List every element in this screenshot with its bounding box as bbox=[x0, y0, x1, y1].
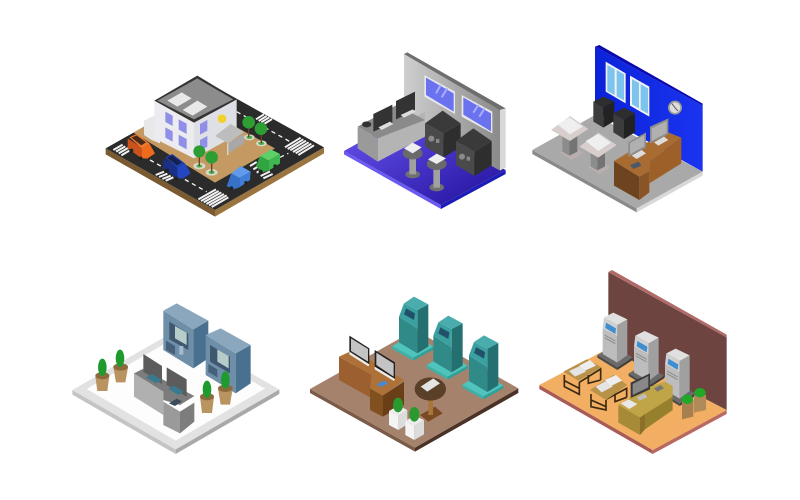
grey ATM 3 bbox=[660, 349, 695, 406]
grey ATM 1 bbox=[597, 313, 633, 370]
floor bbox=[344, 117, 506, 209]
wall bbox=[404, 52, 506, 171]
wall bbox=[608, 270, 727, 410]
trees bbox=[193, 116, 267, 176]
scene: white floor with blue ATMs and plants bbox=[72, 303, 279, 454]
floor bbox=[72, 331, 279, 454]
round table bbox=[415, 377, 446, 422]
dark blue car bbox=[163, 154, 191, 181]
teal ATM 3 bbox=[462, 335, 503, 399]
monitors bbox=[143, 354, 187, 397]
building bbox=[144, 76, 244, 158]
monitors bbox=[628, 118, 668, 159]
floor bbox=[532, 115, 703, 212]
book tables bbox=[563, 359, 627, 410]
scene: grey wall vault room with purple floor bbox=[344, 52, 506, 209]
monitor bbox=[631, 373, 664, 401]
monitors bbox=[373, 92, 416, 132]
wooden desk bbox=[339, 350, 404, 417]
potted plants bbox=[682, 388, 706, 419]
reception desk bbox=[358, 105, 425, 162]
safes bbox=[425, 111, 492, 176]
ATM block 2 bbox=[206, 328, 251, 393]
windows bbox=[424, 75, 492, 133]
wooden desk bbox=[614, 132, 681, 200]
light blue car bbox=[227, 166, 251, 190]
grey ATM 2 bbox=[629, 331, 664, 388]
scene: brown floor with teal ATMs bbox=[310, 297, 518, 452]
scene: maroon wall with grey ATMs on orange floor bbox=[539, 270, 727, 454]
teal ATM 1 bbox=[392, 297, 433, 361]
floor bbox=[539, 348, 727, 454]
block base bbox=[106, 87, 324, 217]
grey desk bbox=[134, 369, 194, 433]
scene: bank building on city block bbox=[106, 76, 324, 217]
crosswalks and lane markings bbox=[113, 112, 314, 207]
teal ATM 2 bbox=[427, 316, 468, 380]
green car bbox=[256, 149, 280, 174]
document stands bbox=[551, 116, 617, 174]
clock bbox=[668, 101, 682, 115]
wall bbox=[595, 45, 703, 172]
orange car bbox=[128, 134, 155, 161]
olive desk bbox=[618, 382, 673, 435]
monitors bbox=[349, 336, 395, 381]
floor bbox=[310, 330, 518, 452]
stands bbox=[403, 143, 447, 191]
tan lot bbox=[133, 102, 275, 183]
ATM block 1 bbox=[163, 303, 208, 368]
potted plants bbox=[95, 350, 233, 413]
white planters bbox=[389, 398, 424, 440]
safes bbox=[593, 97, 635, 139]
windows bbox=[606, 62, 649, 117]
scene: blue wall bank room bbox=[532, 45, 703, 212]
